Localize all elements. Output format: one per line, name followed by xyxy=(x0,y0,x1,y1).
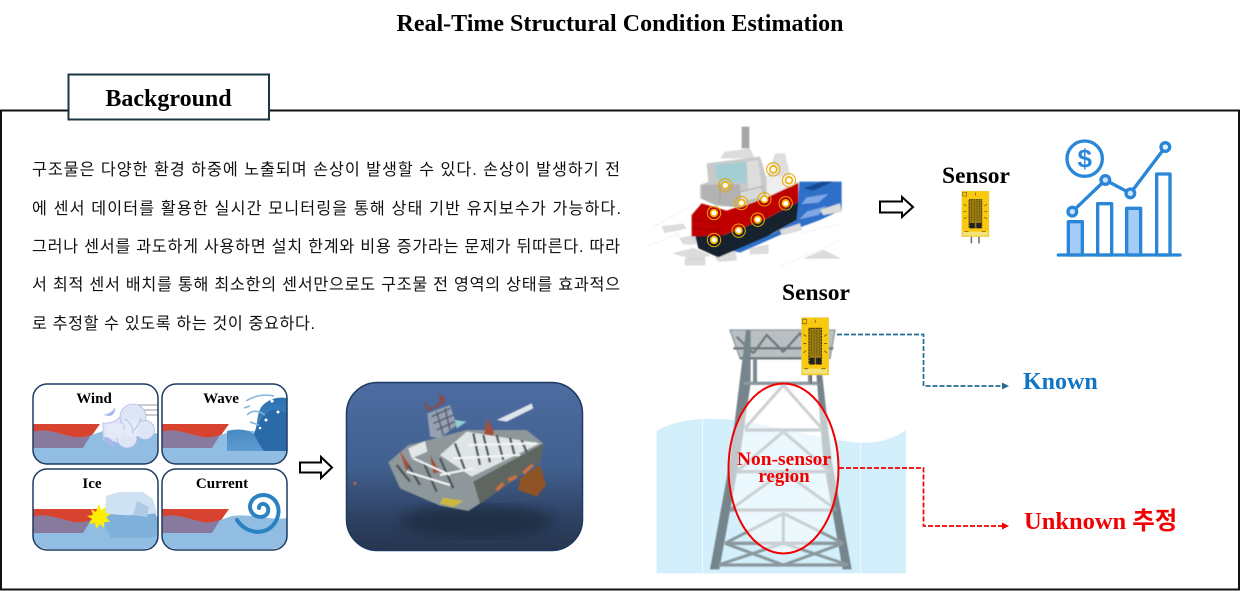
heading tab: Background xyxy=(68,74,269,120)
arrow: unknown connector xyxy=(839,468,1009,530)
callout: non-sensor region ellipse: Non-sensor xyxy=(737,449,832,470)
panel: ice load: Ice xyxy=(82,476,102,492)
callout: non-sensor region ellipse xyxy=(728,384,838,554)
panel: wave load xyxy=(162,384,287,464)
title: Real-Time Structural Condition Estimation xyxy=(396,11,844,37)
panel: ice load xyxy=(33,469,158,550)
text block: Korean description: 서 최적 센서 배치를 통해 최소한의 센서만으로도 구조물 전 영역의 상태를 효과적으 xyxy=(32,276,620,294)
icon: cost growth chart xyxy=(1058,141,1180,255)
label: sensor top: Sensor xyxy=(942,163,1010,189)
text block: Korean description: 로 추정할 수 있도록 하는 것이 중요하다. xyxy=(32,315,315,333)
text block: Korean description xyxy=(32,161,621,333)
arrow: known connector xyxy=(837,334,1009,390)
illustration: offshore jacket structure in water xyxy=(657,330,906,573)
label: sensor on jacket: Sensor xyxy=(782,280,850,306)
heading tab: Background: Background xyxy=(105,86,232,112)
text block: Korean description: 그러나 센서를 과도하게 사용하면 설치 한계와 비용 증가라는 문제가 뒤따른다. 따라 xyxy=(32,238,620,256)
panel: current load xyxy=(162,469,287,550)
label: unknown estimate: Unknown 추정 xyxy=(1024,507,1177,535)
label: known: Known xyxy=(1023,369,1098,395)
text block: Korean description: 구조물은 다양한 환경 하중에 노출되며 손상이 발생할 수 있다. 손상이 발생하기 전 xyxy=(32,161,620,179)
illustration: ship with sensors xyxy=(647,127,842,267)
panel: wind load xyxy=(33,384,158,464)
panel: wind load: Wind xyxy=(76,391,112,407)
panel: current load: Current xyxy=(196,476,248,492)
text block: Korean description: 에 센서 데이터를 활용한 실시간 모니터링을 통해 상태 기반 유지보수가 가능하다. xyxy=(32,200,621,218)
icon: strain gauge sensor xyxy=(962,191,989,243)
sensor on jacket deck xyxy=(802,318,829,383)
photo: capsized offshore platform xyxy=(346,382,582,550)
icon: cost growth chart: $ xyxy=(1077,144,1092,174)
arrow: ship to sensor xyxy=(880,197,913,217)
callout: non-sensor region ellipse: region xyxy=(758,466,810,487)
arrow: loads to damage xyxy=(300,457,332,478)
panel: wave load: Wave xyxy=(203,391,239,407)
